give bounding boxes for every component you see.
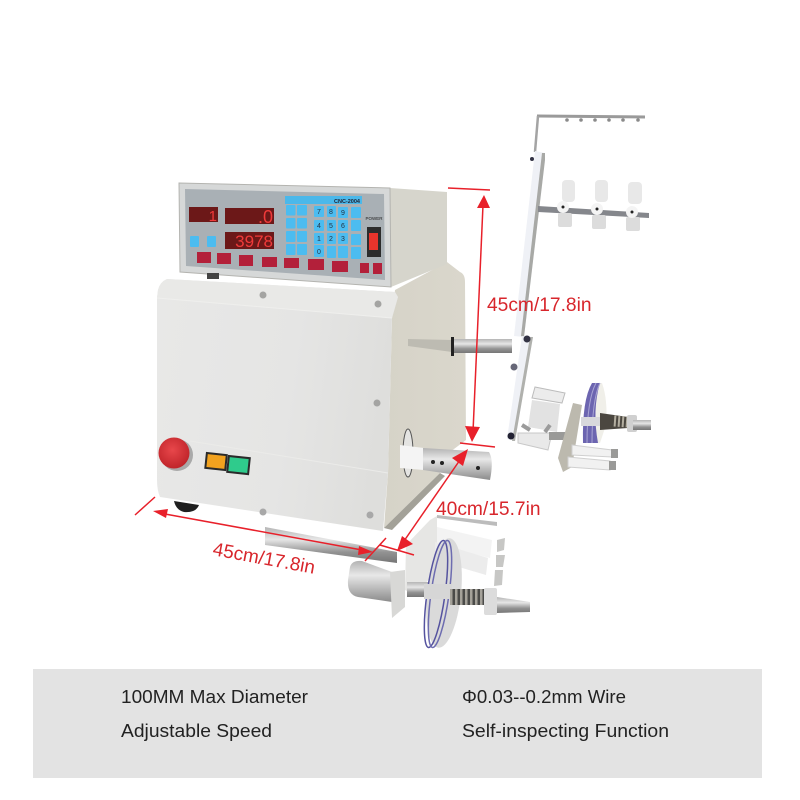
keypad digits: 3 bbox=[341, 236, 345, 243]
depth dimension: 40cm/15.7in: 40cm/15.7in bbox=[436, 499, 541, 520]
feature: self-inspecting: Self-inspecting Function bbox=[462, 721, 669, 741]
height dimension: 45cm/17.8in bbox=[448, 188, 592, 447]
keypad digits: 8 bbox=[329, 209, 333, 216]
reflected shaft on side panel bbox=[408, 339, 452, 352]
keypad digits: 4 bbox=[317, 223, 321, 230]
upper spindle bbox=[451, 337, 512, 356]
keypad digits bbox=[317, 209, 345, 256]
width dimension: 45cm/17.8in: 45cm/17.8in bbox=[211, 539, 317, 579]
keypad digits: 5 bbox=[329, 223, 333, 230]
feature: wire range: Φ0.03--0.2mm Wire bbox=[462, 687, 626, 707]
rear wire guide arm bbox=[507, 116, 649, 441]
keypad digits: 1 bbox=[317, 236, 321, 243]
keypad digits: 2 bbox=[329, 236, 333, 243]
clear disc bbox=[421, 537, 467, 649]
cross bar with three white guides bbox=[538, 180, 649, 231]
height dimension: 45cm/17.8in: 45cm/17.8in bbox=[487, 295, 592, 316]
emergency stop button bbox=[158, 438, 193, 471]
red displays: .0 bbox=[258, 207, 273, 227]
guide rod bbox=[265, 527, 397, 563]
plate bbox=[558, 403, 582, 472]
chain clips bbox=[494, 538, 505, 586]
control box bbox=[179, 183, 447, 287]
width dimension: 45cm/17.8in bbox=[135, 497, 414, 579]
keypad digits: 7 bbox=[317, 209, 321, 216]
red function keys bbox=[197, 252, 382, 274]
purple disc bbox=[583, 383, 606, 443]
orange and green buttons bbox=[205, 453, 250, 474]
blue title bar CNC-2004 bbox=[285, 196, 362, 205]
red displays bbox=[189, 207, 274, 251]
power switch bbox=[365, 216, 383, 257]
power switch: POWER bbox=[365, 216, 383, 221]
keypad digits: 6 bbox=[341, 223, 345, 230]
main machine housing bbox=[157, 262, 466, 531]
feature: max diameter: 100MM Max Diameter bbox=[121, 687, 308, 707]
keypad digits: 9 bbox=[341, 210, 345, 217]
blue keypad bbox=[190, 205, 361, 259]
front winding assembly bbox=[265, 515, 530, 649]
foot bbox=[174, 501, 199, 512]
feature: adjustable speed: Adjustable Speed bbox=[121, 721, 272, 741]
feature band bbox=[33, 669, 762, 778]
keypad digits: 0 bbox=[317, 249, 321, 256]
blue title bar CNC-2004: CNC-2004 bbox=[334, 199, 361, 205]
red displays: 3978 bbox=[235, 232, 273, 251]
rear winding assembly bbox=[518, 383, 651, 472]
housing side panel bbox=[384, 262, 466, 528]
lower spindle bbox=[400, 429, 492, 480]
base rail bbox=[384, 473, 445, 530]
depth dimension: 40cm/15.7in bbox=[397, 449, 541, 551]
red displays: 1 bbox=[209, 208, 217, 225]
